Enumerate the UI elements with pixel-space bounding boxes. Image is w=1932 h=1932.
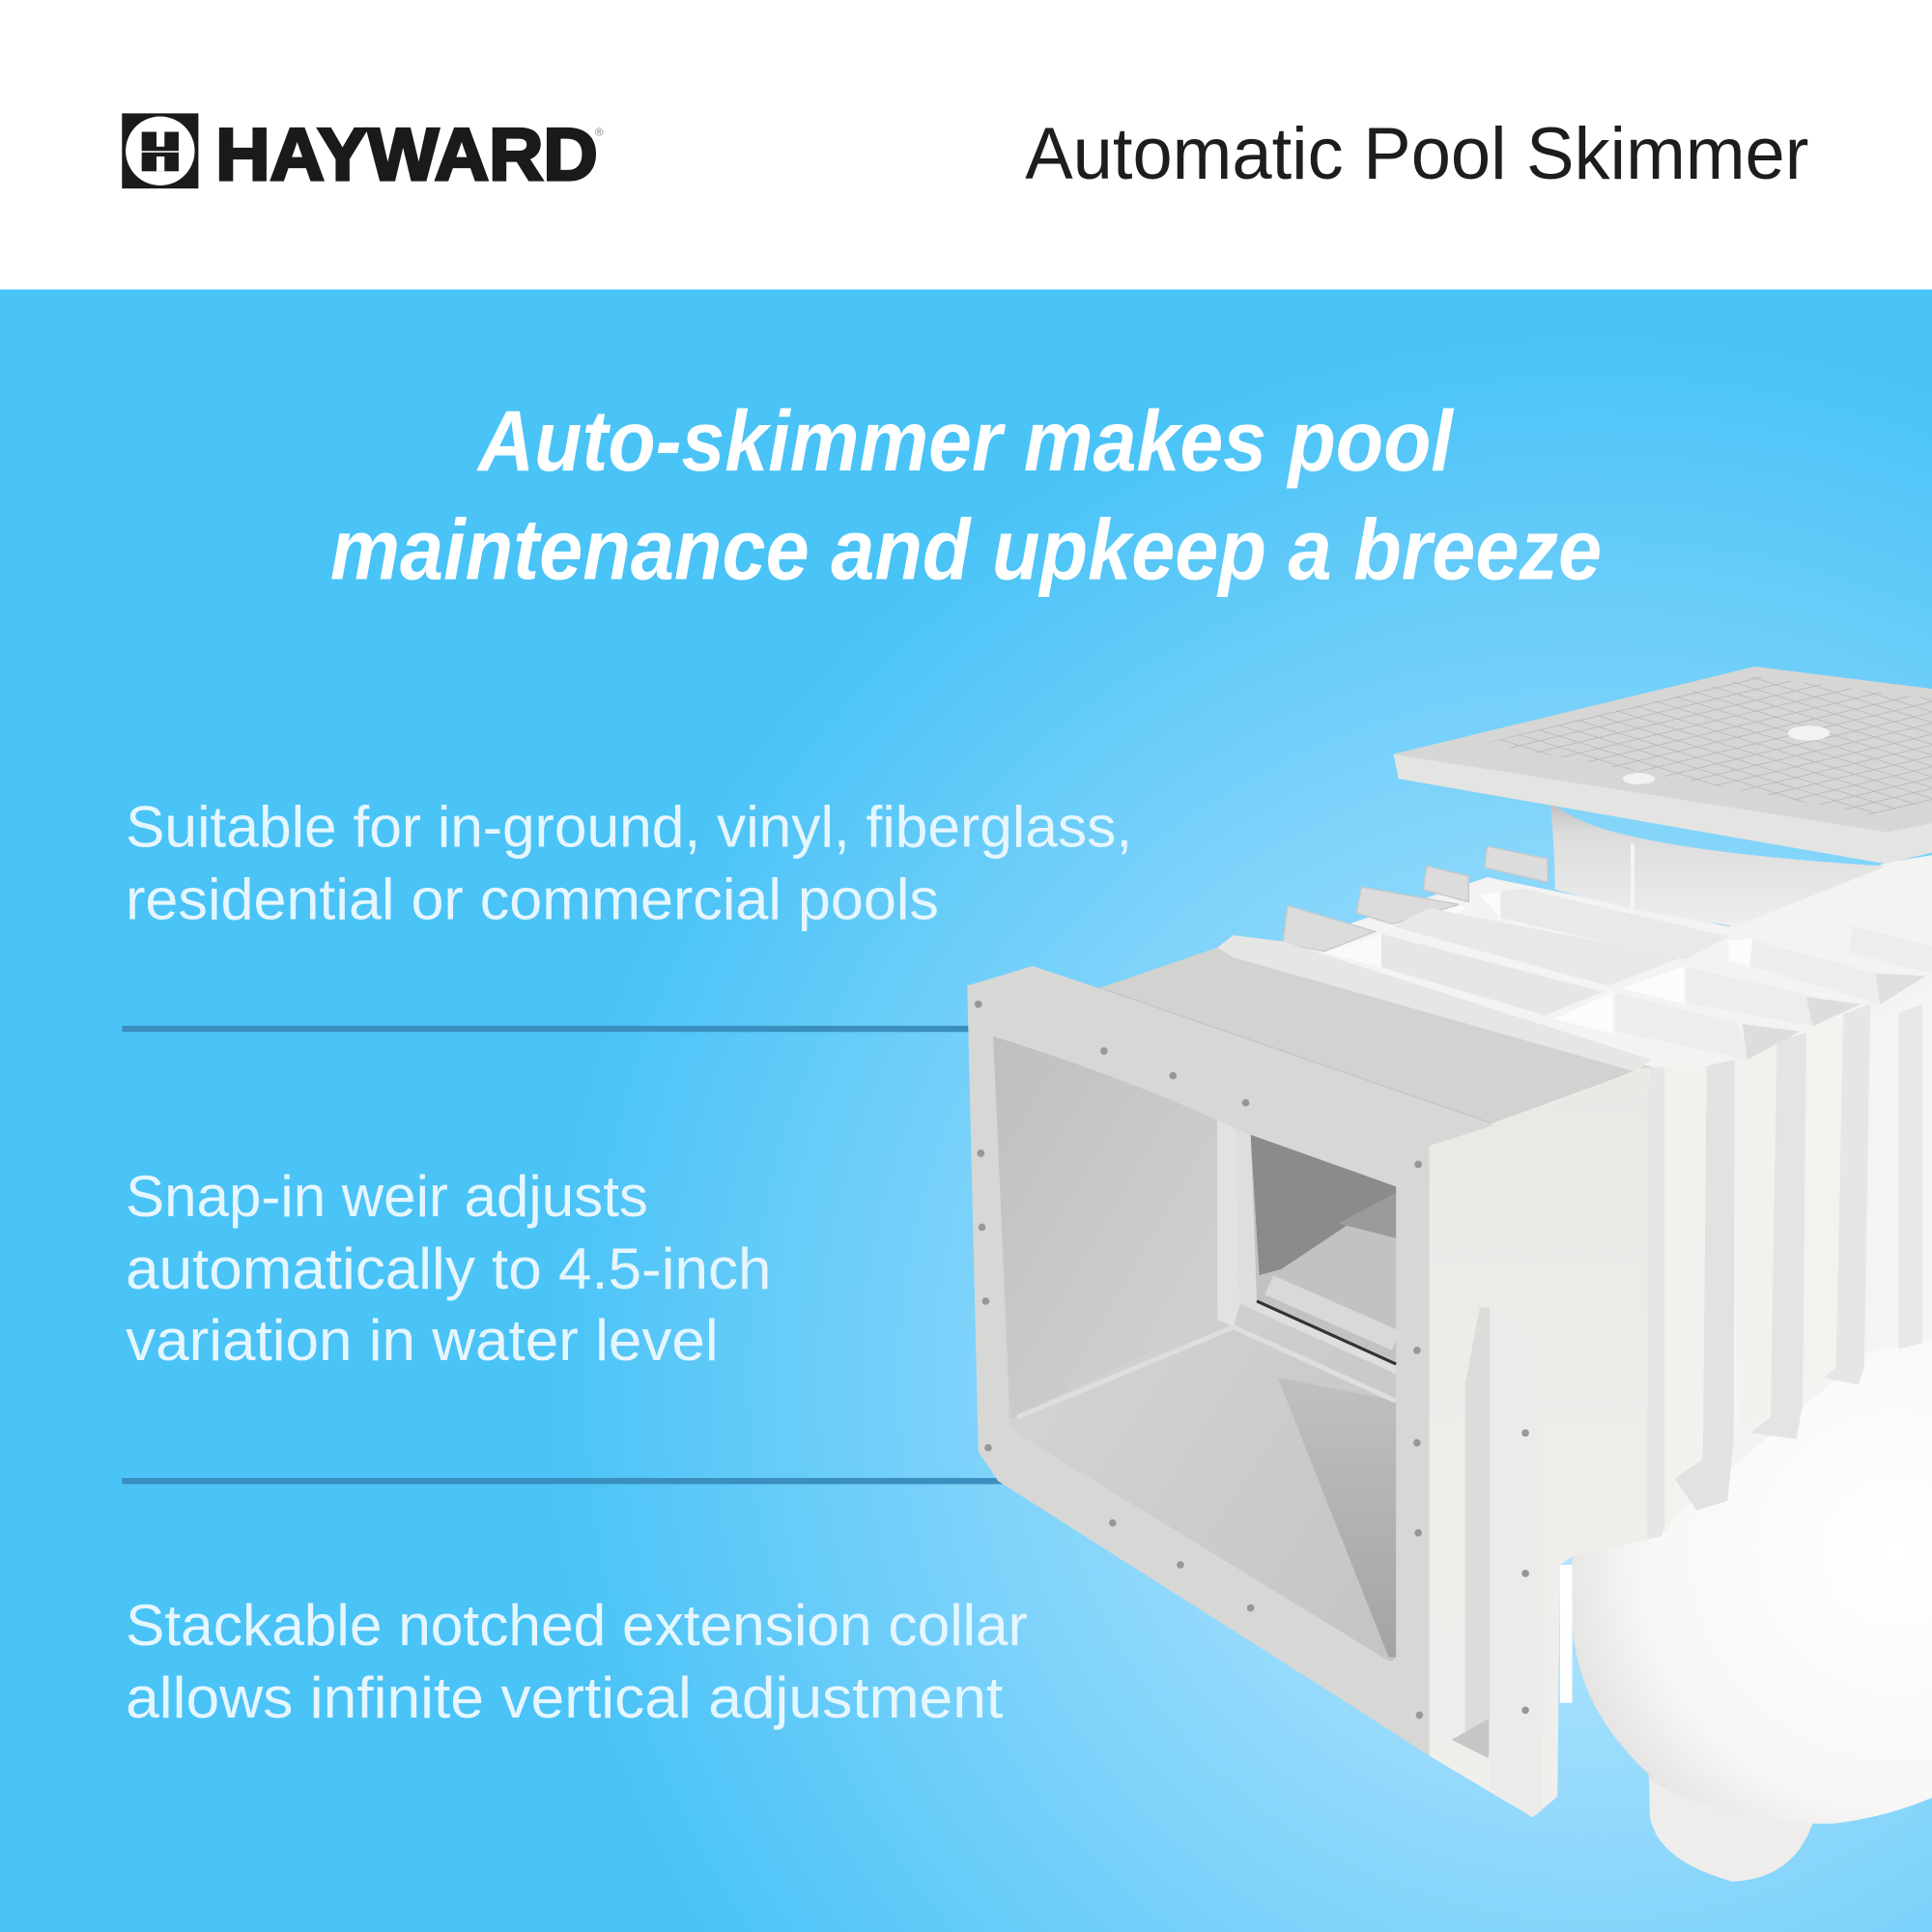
icon: Hayward H badge [122, 113, 198, 188]
front housing side face [1430, 1067, 1647, 1817]
feature text: extension collar: Stackable notched extension collar [126, 1593, 1028, 1658]
registered mark: ® [595, 127, 604, 138]
feature text: pool types [126, 794, 1132, 932]
feature text: snap-in weir [126, 1164, 771, 1373]
square lid [1394, 667, 1932, 864]
logo: Hayward [122, 113, 604, 196]
collar under lid [1550, 801, 1887, 926]
feature text: pool types: residential or commercial pools [126, 867, 939, 932]
feature text: pool types: Suitable for in-ground, vinyl, fiberglass, [126, 794, 1132, 859]
product image: pool skimmer [967, 667, 1932, 1882]
heading: maintenance and upkeep a breeze [330, 500, 1602, 597]
title: Automatic Pool Skimmer [1025, 113, 1808, 195]
feature text: extension collar: allows infinite vertical adjustment [126, 1665, 1004, 1730]
feature text: snap-in weir: automatically to 4.5-inch [126, 1236, 771, 1301]
heading [330, 392, 1602, 597]
feature text: snap-in weir: Snap-in weir adjusts [126, 1164, 648, 1229]
feature text: extension collar [126, 1593, 1028, 1730]
mounting rib [1452, 1307, 1543, 1817]
top face of housing [1099, 935, 1651, 1146]
weir opening [1236, 1128, 1396, 1374]
skimmer bowl [1560, 1306, 1932, 1882]
flange recess [993, 1037, 1396, 1661]
front flange frame [967, 966, 1494, 1756]
logo wordmark: HAYWARD [215, 114, 598, 196]
corrugated side ribs [1606, 985, 1932, 1543]
back fins [1283, 846, 1548, 952]
mounting screw holes [975, 1001, 1529, 1719]
heading: Auto-skimmer makes pool [476, 392, 1455, 489]
channel base [1283, 855, 1932, 1540]
feature text: snap-in weir: variation in water level [126, 1308, 719, 1373]
channel pockets [1323, 889, 1932, 1060]
